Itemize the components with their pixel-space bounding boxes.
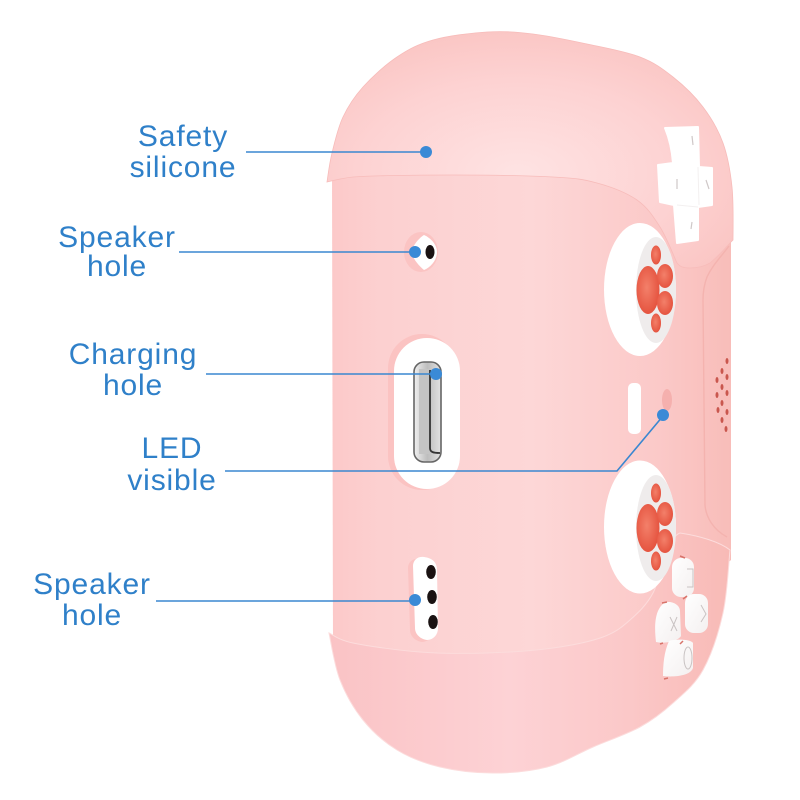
label: LED visible bbox=[127, 432, 217, 497]
label: Speaker hole lower bbox=[33, 568, 151, 632]
callout line: charging hole bbox=[206, 368, 442, 380]
top cap silicone bbox=[327, 32, 733, 268]
top thumbstick with paw bbox=[604, 223, 676, 356]
callout line: Safety silicone bbox=[246, 146, 432, 158]
label: Speaker hole upper bbox=[58, 221, 176, 283]
side panel bbox=[703, 246, 729, 537]
label: LED visible: visible bbox=[127, 464, 217, 497]
label: Safety silicone: silicone bbox=[130, 151, 236, 184]
label: Charging hole: hole bbox=[103, 369, 163, 402]
callout line: upper speaker hole bbox=[179, 246, 421, 258]
speaker grille bbox=[716, 358, 728, 432]
label: Speaker hole lower: Speaker bbox=[33, 568, 151, 601]
small white slot bbox=[628, 383, 641, 434]
label: Safety silicone bbox=[130, 120, 236, 184]
bottom cap silicone bbox=[329, 533, 730, 773]
bottom thumbstick with paw bbox=[604, 460, 676, 594]
action buttons bbox=[655, 556, 708, 679]
label: Charging hole: Charging bbox=[69, 338, 197, 371]
lower speaker holes bbox=[408, 557, 438, 642]
label: Speaker hole upper: hole bbox=[87, 250, 147, 283]
d-pad bbox=[658, 127, 712, 243]
LED hole bbox=[662, 389, 672, 411]
callout line: lower speaker hole bbox=[156, 594, 421, 606]
label: Speaker hole lower: hole bbox=[62, 599, 122, 632]
charging port bbox=[388, 334, 460, 490]
label: Charging hole bbox=[69, 338, 197, 402]
upper speaker hole bbox=[404, 232, 438, 272]
label: LED visible: LED bbox=[142, 432, 202, 465]
label: Safety silicone: Safety bbox=[138, 120, 228, 153]
callout line: LED visible bbox=[225, 409, 669, 471]
case body bbox=[327, 32, 733, 773]
label: Speaker hole upper: Speaker bbox=[58, 221, 176, 254]
